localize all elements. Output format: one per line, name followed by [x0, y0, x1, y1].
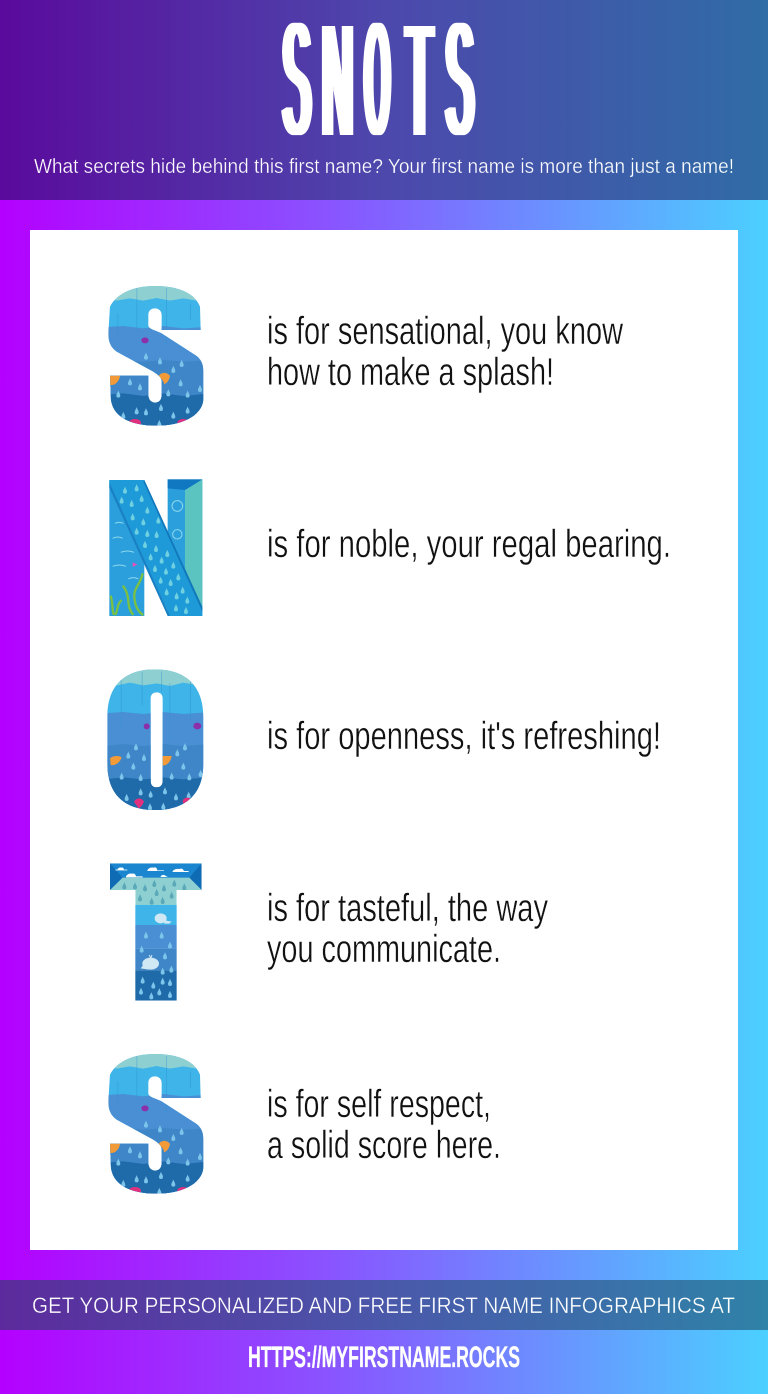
footer url: HTTPS://MYFIRSTNAME.ROCKS [248, 1341, 520, 1374]
text block: second S meaning: a solid score here. [267, 1124, 501, 1167]
letter S illustration [103, 280, 210, 430]
letter S illustration (second) [103, 1048, 210, 1198]
footer band [0, 1280, 768, 1330]
text block: second S meaning: is for self respect, [267, 1083, 491, 1126]
title [282, 0, 474, 176]
text block: S meaning [267, 310, 624, 394]
text block: T meaning: is for tasteful, the way [267, 887, 548, 930]
text block: second S meaning [267, 1083, 501, 1167]
text block: T meaning: you communicate. [267, 928, 501, 971]
letter N illustration [109, 479, 202, 616]
footer call to action: GET YOUR PERSONALIZED AND FREE FIRST NAME INFOGRAPHICS AT [32, 1293, 735, 1318]
text block: T meaning [267, 887, 548, 971]
letter T illustration [107, 862, 207, 1002]
subtitle: What secrets hide behind this first name? Your first name is more than just a name! [34, 156, 734, 178]
header band [0, 0, 768, 200]
panel: white content card [30, 230, 738, 1250]
letter O illustration [107, 669, 204, 810]
text block: S meaning: how to make a splash! [267, 351, 554, 394]
text block: S meaning: is for sensational, you know [267, 310, 624, 353]
